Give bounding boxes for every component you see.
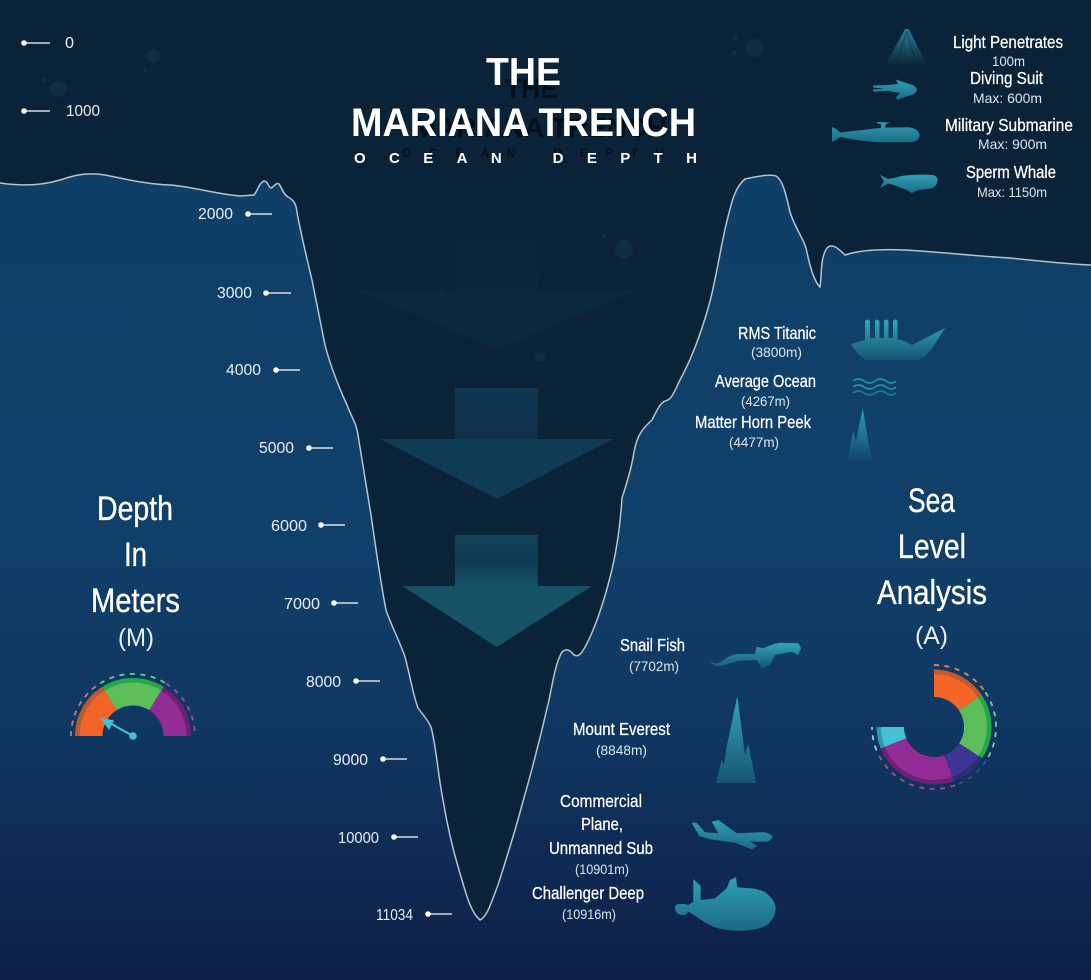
depth 5000: [259, 440, 333, 457]
depth 10000: [338, 830, 418, 847]
bubbles: [42, 36, 764, 362]
depth 5000: 5000: [259, 440, 294, 457]
label: matter horn peek: Matter Horn Peek: [695, 412, 811, 432]
label: snail fish: (7702m): [629, 658, 679, 674]
depth 3000: 3000: [217, 285, 252, 302]
depth 7000: 7000: [284, 596, 320, 613]
icon: unmanned submersible: [675, 877, 776, 931]
label: mount everest: (8848m): [596, 742, 647, 758]
label: mount everest: Mount Everest: [573, 719, 670, 739]
label: diving suit: Max: 600m: [973, 90, 1042, 106]
heading: depth in meters: Meters: [91, 582, 180, 620]
label: military submarine: Military Submarine: [945, 115, 1073, 135]
label: average ocean: [715, 371, 816, 409]
icon: titanic ship: [851, 320, 945, 360]
label: challenger deep: [532, 883, 644, 922]
label: light penetrates: Light Penetrates: [953, 32, 1063, 52]
label: matter horn peek: (4477m): [729, 434, 779, 450]
gauge dashed ring: [71, 674, 195, 736]
depth 6000: [271, 518, 345, 535]
depth 11034: [376, 907, 452, 924]
gauge needle: [100, 718, 137, 740]
donut dashed ring: [872, 665, 996, 789]
depth 3000: [217, 285, 291, 302]
donut segments: [892, 686, 976, 768]
label: matter horn peek: [695, 412, 811, 450]
gauge segments: [91, 694, 175, 736]
heading: sea level analysis: (A): [915, 622, 948, 650]
label: sperm whale: Sperm Whale: [966, 162, 1056, 182]
label: sperm whale: Max: 1150m: [977, 184, 1047, 200]
label: light penetrates: 100m: [992, 53, 1025, 69]
depth 11034: 11034: [376, 907, 413, 924]
label: commercial plane, unmanned sub: Unmanned Sub: [549, 838, 653, 858]
label: snail fish: Snail Fish: [620, 635, 685, 655]
label: diving suit: Diving Suit: [970, 68, 1043, 88]
label: rms titanic: (3800m): [751, 344, 802, 360]
label: commercial plane, unmanned sub: (10901m): [575, 861, 629, 877]
heading: sea level analysis: Analysis: [877, 574, 987, 612]
label: military submarine: [945, 115, 1073, 152]
heading: depth in meters: In: [124, 536, 147, 574]
icon: matterhorn peak: [847, 408, 872, 463]
label: mount everest: [573, 719, 670, 758]
label: sperm whale: [966, 162, 1056, 200]
label: commercial plane, unmanned sub: Plane,: [581, 814, 623, 834]
icon: light cone: [885, 29, 928, 66]
depth 10000: 10000: [338, 830, 379, 847]
label: average ocean: Average Ocean: [715, 371, 816, 391]
depth 8000: [306, 674, 380, 691]
donut chart: [872, 665, 996, 789]
icon: sperm whale: [880, 175, 938, 193]
icon: waves: [853, 379, 896, 395]
depth 6000: 6000: [271, 518, 307, 535]
title: [351, 51, 697, 167]
depth 7000: [284, 596, 358, 613]
title line two: MARIANA TRENCH: [351, 101, 696, 145]
label: challenger deep: Challenger Deep: [532, 883, 644, 903]
icon: plane: [692, 820, 773, 849]
arrow: faint top downward arrow: [358, 240, 635, 349]
label: light penetrates: [953, 32, 1063, 69]
label: rms titanic: RMS Titanic: [738, 323, 816, 343]
depth 8000: 8000: [306, 674, 341, 691]
arrow: middle downward arrow: [380, 388, 613, 499]
coastline stroke: [0, 174, 1091, 920]
gauge chart: [71, 674, 195, 740]
depth 4000: [226, 362, 300, 379]
icon: diver: [873, 80, 917, 100]
depth 0: [21, 35, 74, 52]
depth 1000: 1000: [66, 103, 100, 120]
label: commercial plane, unmanned sub: [549, 791, 653, 877]
depth 2000: 2000: [198, 206, 233, 223]
depth scale: [21, 35, 452, 924]
label: military submarine: Max: 900m: [978, 136, 1047, 152]
subtitle: OCEAN DEPTH: [354, 150, 697, 167]
title shadow: MARIANA TRENCH: [413, 112, 667, 143]
label: rms titanic: [738, 323, 816, 360]
heading: sea level analysis: Level: [898, 528, 966, 566]
depth 4000: 4000: [226, 362, 261, 379]
depth 0: 0: [65, 35, 74, 52]
label: diving suit: [970, 68, 1043, 106]
label: challenger deep: (10916m): [562, 906, 616, 922]
depth 1000: [21, 103, 100, 120]
heading: sea level analysis: [877, 482, 987, 650]
icon: mount everest peak: [716, 696, 756, 783]
label: commercial plane, unmanned sub: Commercial: [560, 791, 642, 811]
heading: depth in meters: [91, 490, 180, 652]
title shadow: OCEAN DEPTH: [402, 146, 664, 160]
title line one: THE: [486, 51, 561, 94]
icon: military submarine: [832, 122, 920, 142]
depth 2000: [198, 206, 272, 223]
icon: snail fish: [707, 643, 801, 668]
gauge dark rim: [77, 680, 188, 736]
depth 9000: 9000: [333, 752, 368, 769]
heading: sea level analysis: Sea: [908, 482, 955, 520]
heading: depth in meters: (M): [118, 624, 154, 652]
label: average ocean: (4267m): [741, 393, 790, 409]
arrow: lower downward arrow: [402, 535, 592, 647]
donut rim: [879, 672, 989, 782]
heading: depth in meters: Depth: [97, 490, 173, 528]
depth 9000: [333, 752, 407, 769]
title shadow: THE: [505, 73, 558, 104]
label: snail fish: [620, 635, 685, 674]
title shadow: [402, 73, 667, 160]
